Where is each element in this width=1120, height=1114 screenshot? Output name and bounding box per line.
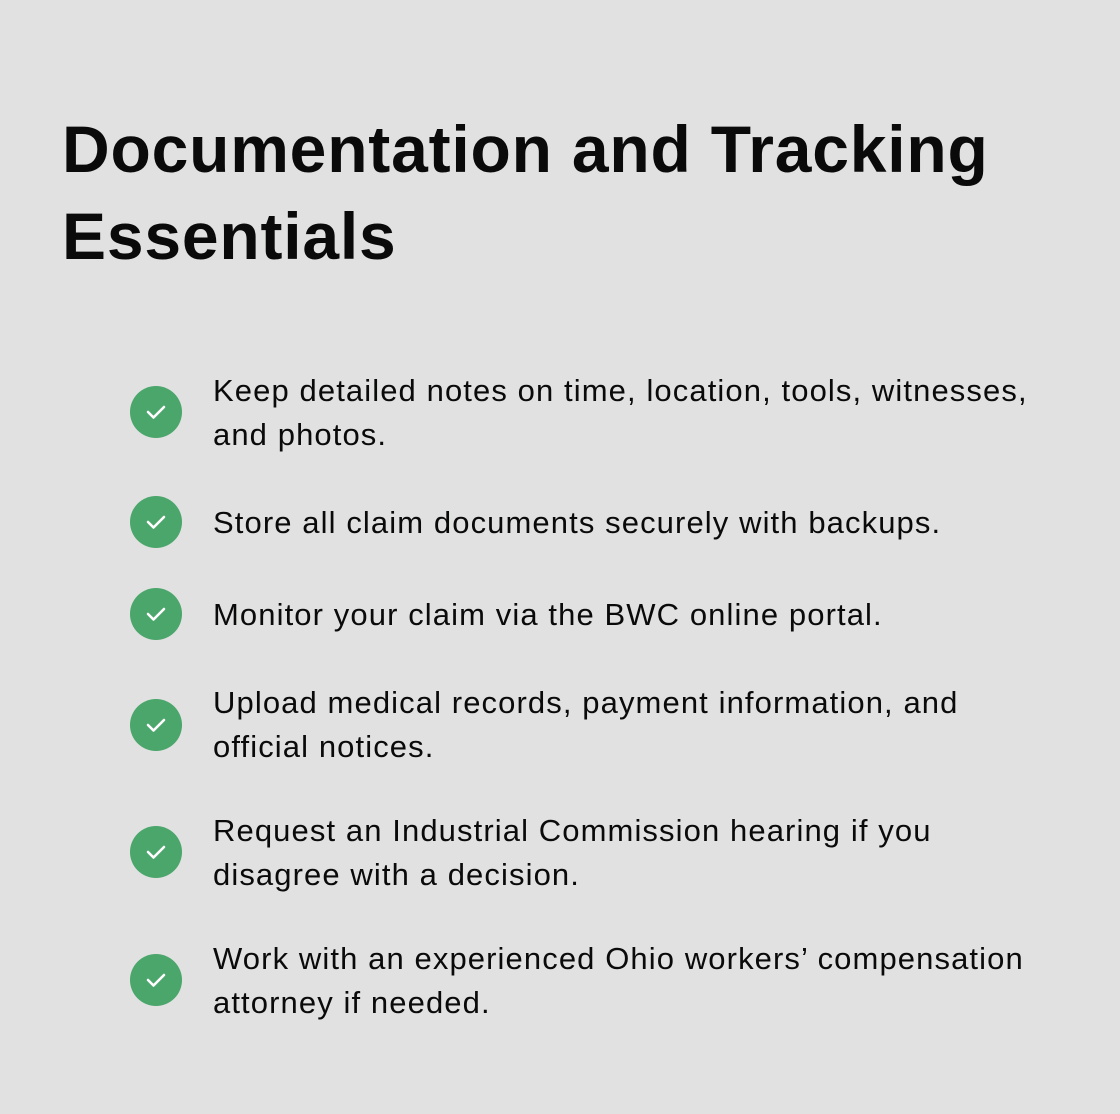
title: Essentials bbox=[62, 199, 397, 273]
icon: check bbox=[130, 699, 182, 751]
icon: check bbox=[130, 496, 182, 548]
icon: check bbox=[130, 588, 182, 640]
text: disagree with a decision. bbox=[213, 857, 580, 892]
item 4 bbox=[130, 685, 958, 764]
text: Keep detailed notes on time, location, tools, witnesses, bbox=[213, 373, 1028, 408]
text: Upload medical records, payment information, and bbox=[213, 685, 958, 720]
text: Store all claim documents securely with backups. bbox=[213, 505, 941, 540]
text: attorney if needed. bbox=[213, 985, 491, 1020]
title: Documentation and Tracking bbox=[62, 112, 989, 186]
item 2 bbox=[130, 496, 941, 548]
text bbox=[213, 941, 1024, 1020]
item 1 bbox=[130, 373, 1028, 452]
text: official notices. bbox=[213, 729, 434, 764]
text: Request an Industrial Commission hearing if you bbox=[213, 813, 932, 848]
icon: check bbox=[130, 954, 182, 1006]
item 3 bbox=[130, 588, 883, 640]
icon: check bbox=[130, 386, 182, 438]
text bbox=[213, 685, 958, 764]
text bbox=[213, 813, 932, 892]
text: and photos. bbox=[213, 417, 387, 452]
item 6 bbox=[130, 941, 1024, 1020]
text: Monitor your claim via the BWC online portal. bbox=[213, 597, 883, 632]
item 5 bbox=[130, 813, 932, 892]
icon: check bbox=[130, 826, 182, 878]
text: Work with an experienced Ohio workers’ compensation bbox=[213, 941, 1024, 976]
title bbox=[62, 112, 989, 273]
text bbox=[213, 373, 1028, 452]
